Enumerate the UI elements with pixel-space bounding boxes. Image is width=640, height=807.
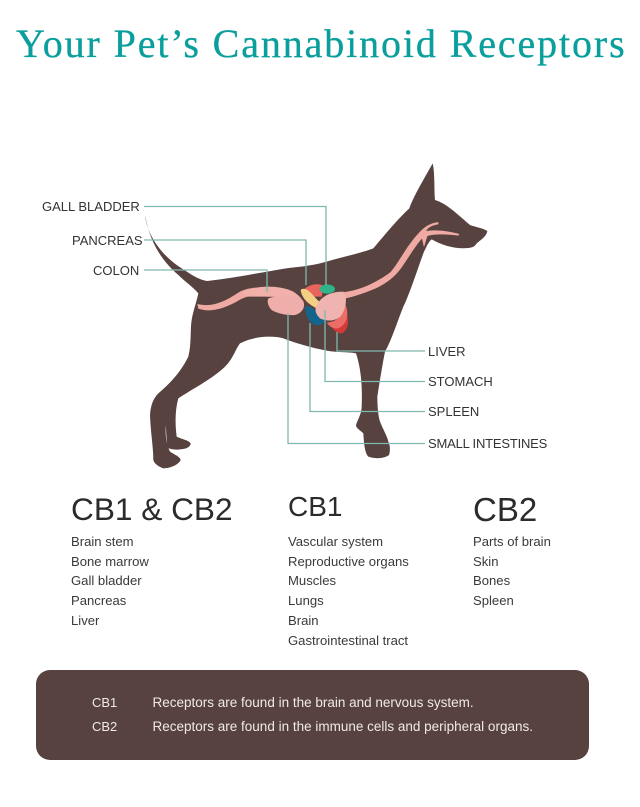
list: CB1 & CB2: Pancreas xyxy=(71,593,126,608)
list: CB2: Skin xyxy=(473,554,498,569)
dog silhouette xyxy=(145,163,487,468)
list: CB2: Spleen xyxy=(473,593,514,608)
heading: CB1 & CB2: CB1 & CB2 xyxy=(71,491,233,527)
pancreas xyxy=(301,289,319,308)
row: CB2: CB2 xyxy=(92,719,117,734)
gall bladder xyxy=(320,284,335,294)
list: CB1 & CB2: Brain stem xyxy=(71,534,134,549)
label: small intestines: SMALL INTESTINES xyxy=(428,436,547,451)
gall bladder line xyxy=(144,206,326,285)
stomach xyxy=(316,292,346,321)
label: colon: COLON xyxy=(93,263,139,278)
row: CB1 xyxy=(92,695,474,710)
small intestines line xyxy=(288,313,425,444)
label: gall bladder: GALL BLADDER xyxy=(42,199,140,214)
row: CB1: CB1 xyxy=(92,695,117,710)
list: CB2 xyxy=(473,534,551,608)
list: CB1: Brain xyxy=(288,613,319,628)
list: CB1 & CB2: Liver xyxy=(71,613,99,628)
list: CB1: Lungs xyxy=(288,593,324,608)
list: CB2: Parts of brain xyxy=(473,534,551,549)
list: CB1 & CB2: Gall bladder xyxy=(71,573,142,588)
stomach line xyxy=(325,310,425,382)
colon line xyxy=(144,270,267,292)
spleen line xyxy=(310,323,425,412)
list: CB1 & CB2: Bone marrow xyxy=(71,554,149,569)
dog anatomy diagram xyxy=(144,164,488,468)
heading: CB2: CB2 xyxy=(473,491,537,528)
list: CB1: Gastrointestinal tract xyxy=(288,633,408,648)
title: Your Pet’s Cannabinoid Receptors xyxy=(16,21,627,66)
panel: receptor summary: Receptors are found in the immune cells and peripheral organs. xyxy=(152,719,533,734)
label: spleen: SPLEEN xyxy=(428,404,479,419)
list: CB2: Bones xyxy=(473,573,510,588)
pancreas line xyxy=(144,240,306,285)
label: pancreas: PANCREAS xyxy=(72,233,143,248)
leader lines xyxy=(144,206,425,444)
label: stomach: STOMACH xyxy=(428,374,493,389)
list: CB1 xyxy=(288,534,409,648)
liver xyxy=(330,310,348,333)
panel: receptor summary xyxy=(36,670,589,760)
row: CB2 xyxy=(92,719,533,734)
small intestines xyxy=(268,295,304,315)
heading: CB1: CB1 xyxy=(288,491,342,522)
panel: receptor summary: Receptors are found in the brain and nervous system. xyxy=(152,695,474,710)
list: CB1 & CB2 xyxy=(71,534,149,628)
colon xyxy=(243,287,302,299)
digestive tract xyxy=(197,287,270,310)
liver line xyxy=(337,332,425,351)
list: CB1: Vascular system xyxy=(288,534,383,549)
label: liver: LIVER xyxy=(428,344,466,359)
list: CB1: Reproductive organs xyxy=(288,554,409,569)
list: CB1: Muscles xyxy=(288,573,336,588)
spleen xyxy=(305,306,325,325)
